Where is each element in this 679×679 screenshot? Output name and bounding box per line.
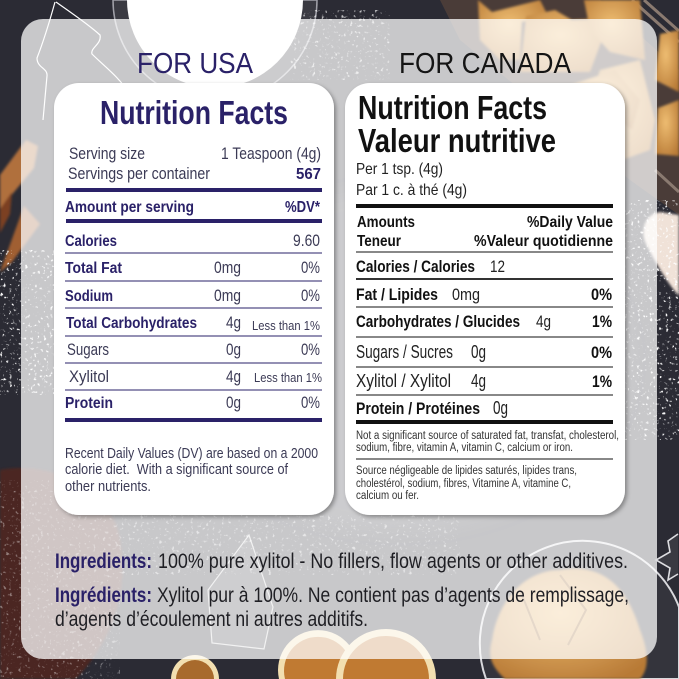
USA title: Nutrition Facts — [100, 94, 288, 131]
USA table header: Amount per serving — [65, 199, 194, 216]
USA nutrient rows: Total Fat — [65, 260, 123, 277]
citrus slices — [171, 629, 436, 679]
USA serving information: 567 — [296, 166, 321, 183]
Canada nutrient rows: Carbohydrates / Glucides — [356, 312, 520, 331]
Canada English footnote: sodium, fibre, vitamin A, vitamin C, calcium or iron. — [356, 442, 573, 454]
USA nutrient rows: Sugars — [67, 340, 109, 359]
Canada serving information: Par 1 c. à thé (4g) — [356, 182, 467, 199]
USA nutrient rows: 0% — [301, 286, 320, 305]
Canada nutrient rows: 0mg — [452, 285, 480, 304]
USA nutrient rows: Less than 1% — [252, 318, 320, 333]
Canada English footnote — [356, 430, 619, 454]
wooden rack behind cookies — [440, 0, 679, 215]
USA nutrient rows: Xylitol — [69, 367, 109, 386]
USA nutrient rows: 9.60 — [293, 231, 320, 250]
Canada nutrient rows: 0g — [471, 342, 486, 362]
Canada French footnote — [356, 465, 577, 502]
Canada nutrient rows: 0% — [591, 343, 612, 362]
cookie bowl — [480, 541, 679, 679]
text block: French ingredients: Ingrédients: — [55, 584, 152, 607]
Canada nutrient rows: 1% — [592, 312, 612, 331]
Canada French footnote: calcium ou fer. — [356, 490, 419, 502]
USA table header: %DV* — [285, 199, 321, 216]
Canada nutrient rows: 4g — [471, 371, 486, 391]
panel: USA nutrition facts — [54, 83, 334, 515]
heading: for Canada: FOR CANADA — [399, 48, 572, 80]
USA footnote — [65, 446, 318, 495]
brown dough — [0, 468, 122, 679]
Canada table header: %Daily Value — [527, 214, 613, 231]
Canada table header: Teneur — [357, 233, 401, 250]
flour bowl — [113, 0, 317, 102]
icon: star cookie cutter outline — [656, 534, 678, 580]
USA serving information: 1 Teaspoon (4g) — [221, 144, 321, 163]
Canada nutrient rows: Sugars / Sucres — [356, 342, 453, 362]
USA nutrient rows: 4g — [226, 313, 241, 332]
Canada French footnote: cholestérol, sodium, fibres, Vitamine A, vitamine C, — [356, 478, 571, 490]
Canada nutrient rows: 0g — [493, 398, 508, 418]
icon: tree cookie cutter outline — [37, 2, 128, 120]
USA nutrient rows: 0g — [226, 393, 241, 412]
USA nutrient rows: Less than 1% — [254, 370, 322, 385]
USA footnote: calorie diet. With a significant source of — [65, 462, 289, 478]
text block: French ingredients — [55, 584, 629, 631]
USA nutrient rows: 0% — [301, 340, 320, 359]
USA nutrient rows: 4g — [226, 367, 241, 386]
USA nutrient rows: Calories — [65, 233, 117, 250]
USA nutrient rows: Sodium — [65, 288, 113, 305]
rolling pin — [643, 212, 679, 296]
Canada nutrient rows: Calories / Calories — [356, 257, 475, 276]
Canada title — [358, 89, 556, 159]
USA nutrient rows: 0% — [301, 258, 320, 277]
USA serving information: Servings per container — [68, 164, 210, 183]
Canada French footnote: Source négligeable de lipides saturés, lipides trans, — [356, 465, 577, 477]
USA serving information: Serving size — [69, 144, 145, 163]
text block: French ingredients: d’agents d’écoulement ni autres additifs. — [55, 608, 368, 631]
icon: house cookie cutter outline — [208, 535, 273, 649]
USA nutrient rows: 0mg — [214, 258, 241, 277]
Canada table header: Amounts — [357, 214, 415, 231]
USA serving information — [68, 144, 321, 183]
Canada title: Nutrition Facts — [358, 89, 547, 126]
USA nutrient rows: Protein — [65, 395, 113, 412]
Canada English footnote: Not a significant source of saturated fat, transfat, cholesterol, — [356, 430, 619, 442]
USA footnote: Recent Daily Values (DV) are based on a 2000 — [65, 446, 318, 462]
Canada table header: %Valeur quotidienne — [474, 233, 613, 250]
text block: English ingredients: Ingredients: — [55, 550, 152, 573]
cookies top right — [478, 0, 679, 160]
USA nutrient rows: 0g — [226, 340, 241, 359]
Canada nutrient rows: 4g — [536, 312, 551, 331]
heading: for USA: FOR USA — [137, 48, 254, 80]
USA table header — [65, 199, 321, 216]
Canada serving information — [356, 161, 467, 199]
Canada nutrient rows: 12 — [490, 257, 505, 276]
Canada nutrient rows — [356, 257, 613, 418]
Canada nutrient rows: Protein / Protéines — [356, 399, 480, 418]
USA nutrient rows: 0% — [301, 393, 320, 412]
Canada nutrient rows: Fat / Lipides — [356, 285, 438, 304]
panel: Canada nutrition facts — [345, 83, 625, 515]
USA nutrient rows — [65, 231, 322, 412]
Canada serving information: Per 1 tsp. (4g) — [356, 161, 443, 178]
Canada nutrient rows: 1% — [592, 372, 612, 391]
Canada nutrient rows: Xylitol / Xylitol — [356, 371, 451, 391]
Canada nutrient rows: 0% — [591, 285, 612, 304]
USA nutrient rows: 0mg — [214, 286, 241, 305]
USA nutrient rows: Total Carbohydrates — [66, 315, 197, 332]
Canada title: Valeur nutritive — [358, 122, 556, 159]
cinnamon sticks — [0, 140, 40, 272]
Canada table header — [357, 214, 613, 250]
USA footnote: other nutrients. — [65, 479, 151, 495]
